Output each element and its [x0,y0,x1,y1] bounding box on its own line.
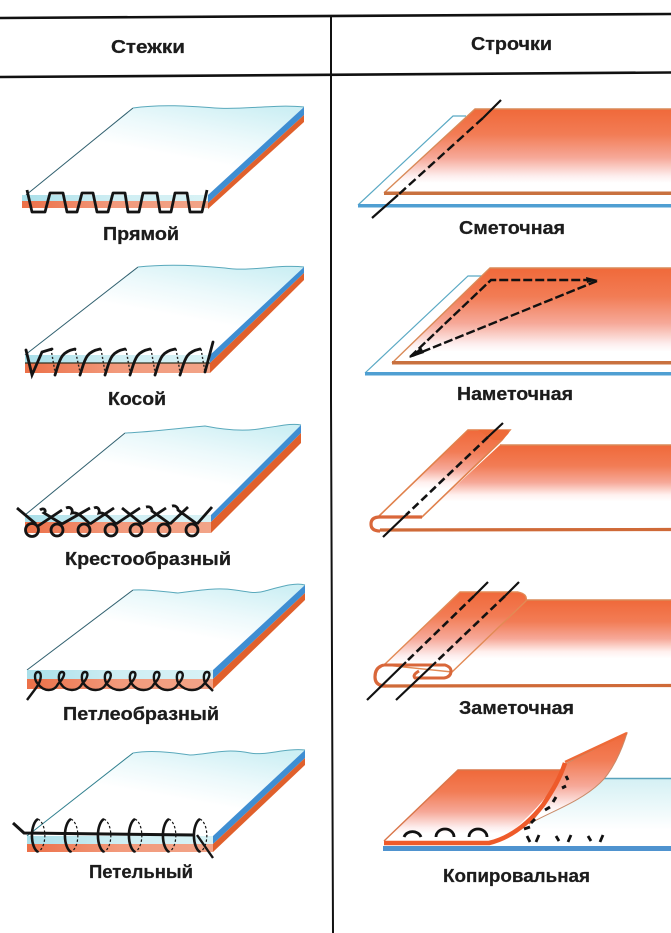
panel: tacking stitch [365,268,671,376]
label: Петлеобразный: Петлеобразный [63,704,219,724]
heading: Строчки: Строчки [471,34,552,54]
stitch line [27,190,207,212]
label: Копировальная: Копировальная [443,866,590,886]
panel: double hem tacking [367,582,671,700]
stitch line [372,100,501,218]
stitch lines [367,582,519,700]
label: Прямой: Прямой [103,224,179,244]
label: Заметочная: Заметочная [459,698,574,718]
label: Сметочная: Сметочная [459,218,565,238]
stitch loops and crosses [17,506,212,536]
heading: Стежки: Стежки [111,37,185,57]
panel: basting stitch [358,100,671,218]
stitch line [26,342,213,375]
label: Крестообразный: Крестообразный [65,549,231,569]
stitch line [27,672,213,700]
dotted back threads [51,349,205,372]
label: Наметочная: Наметочная [457,384,573,404]
panel: hem tacking [371,423,671,537]
panel: buttonhole stitch [13,750,305,858]
panel: straight stitch [22,106,304,212]
label: Косой: Косой [108,389,166,409]
panel: cross stitch [17,424,301,536]
label: Петельный: Петельный [89,862,193,882]
stitch line [383,423,503,537]
stitch line [13,819,213,858]
stitch arrows [409,277,598,358]
panel: loop stitch [27,584,305,700]
loops and cut threads [404,776,603,842]
panel: tailor tack [383,733,671,851]
panel: slanted stitch [25,265,304,375]
